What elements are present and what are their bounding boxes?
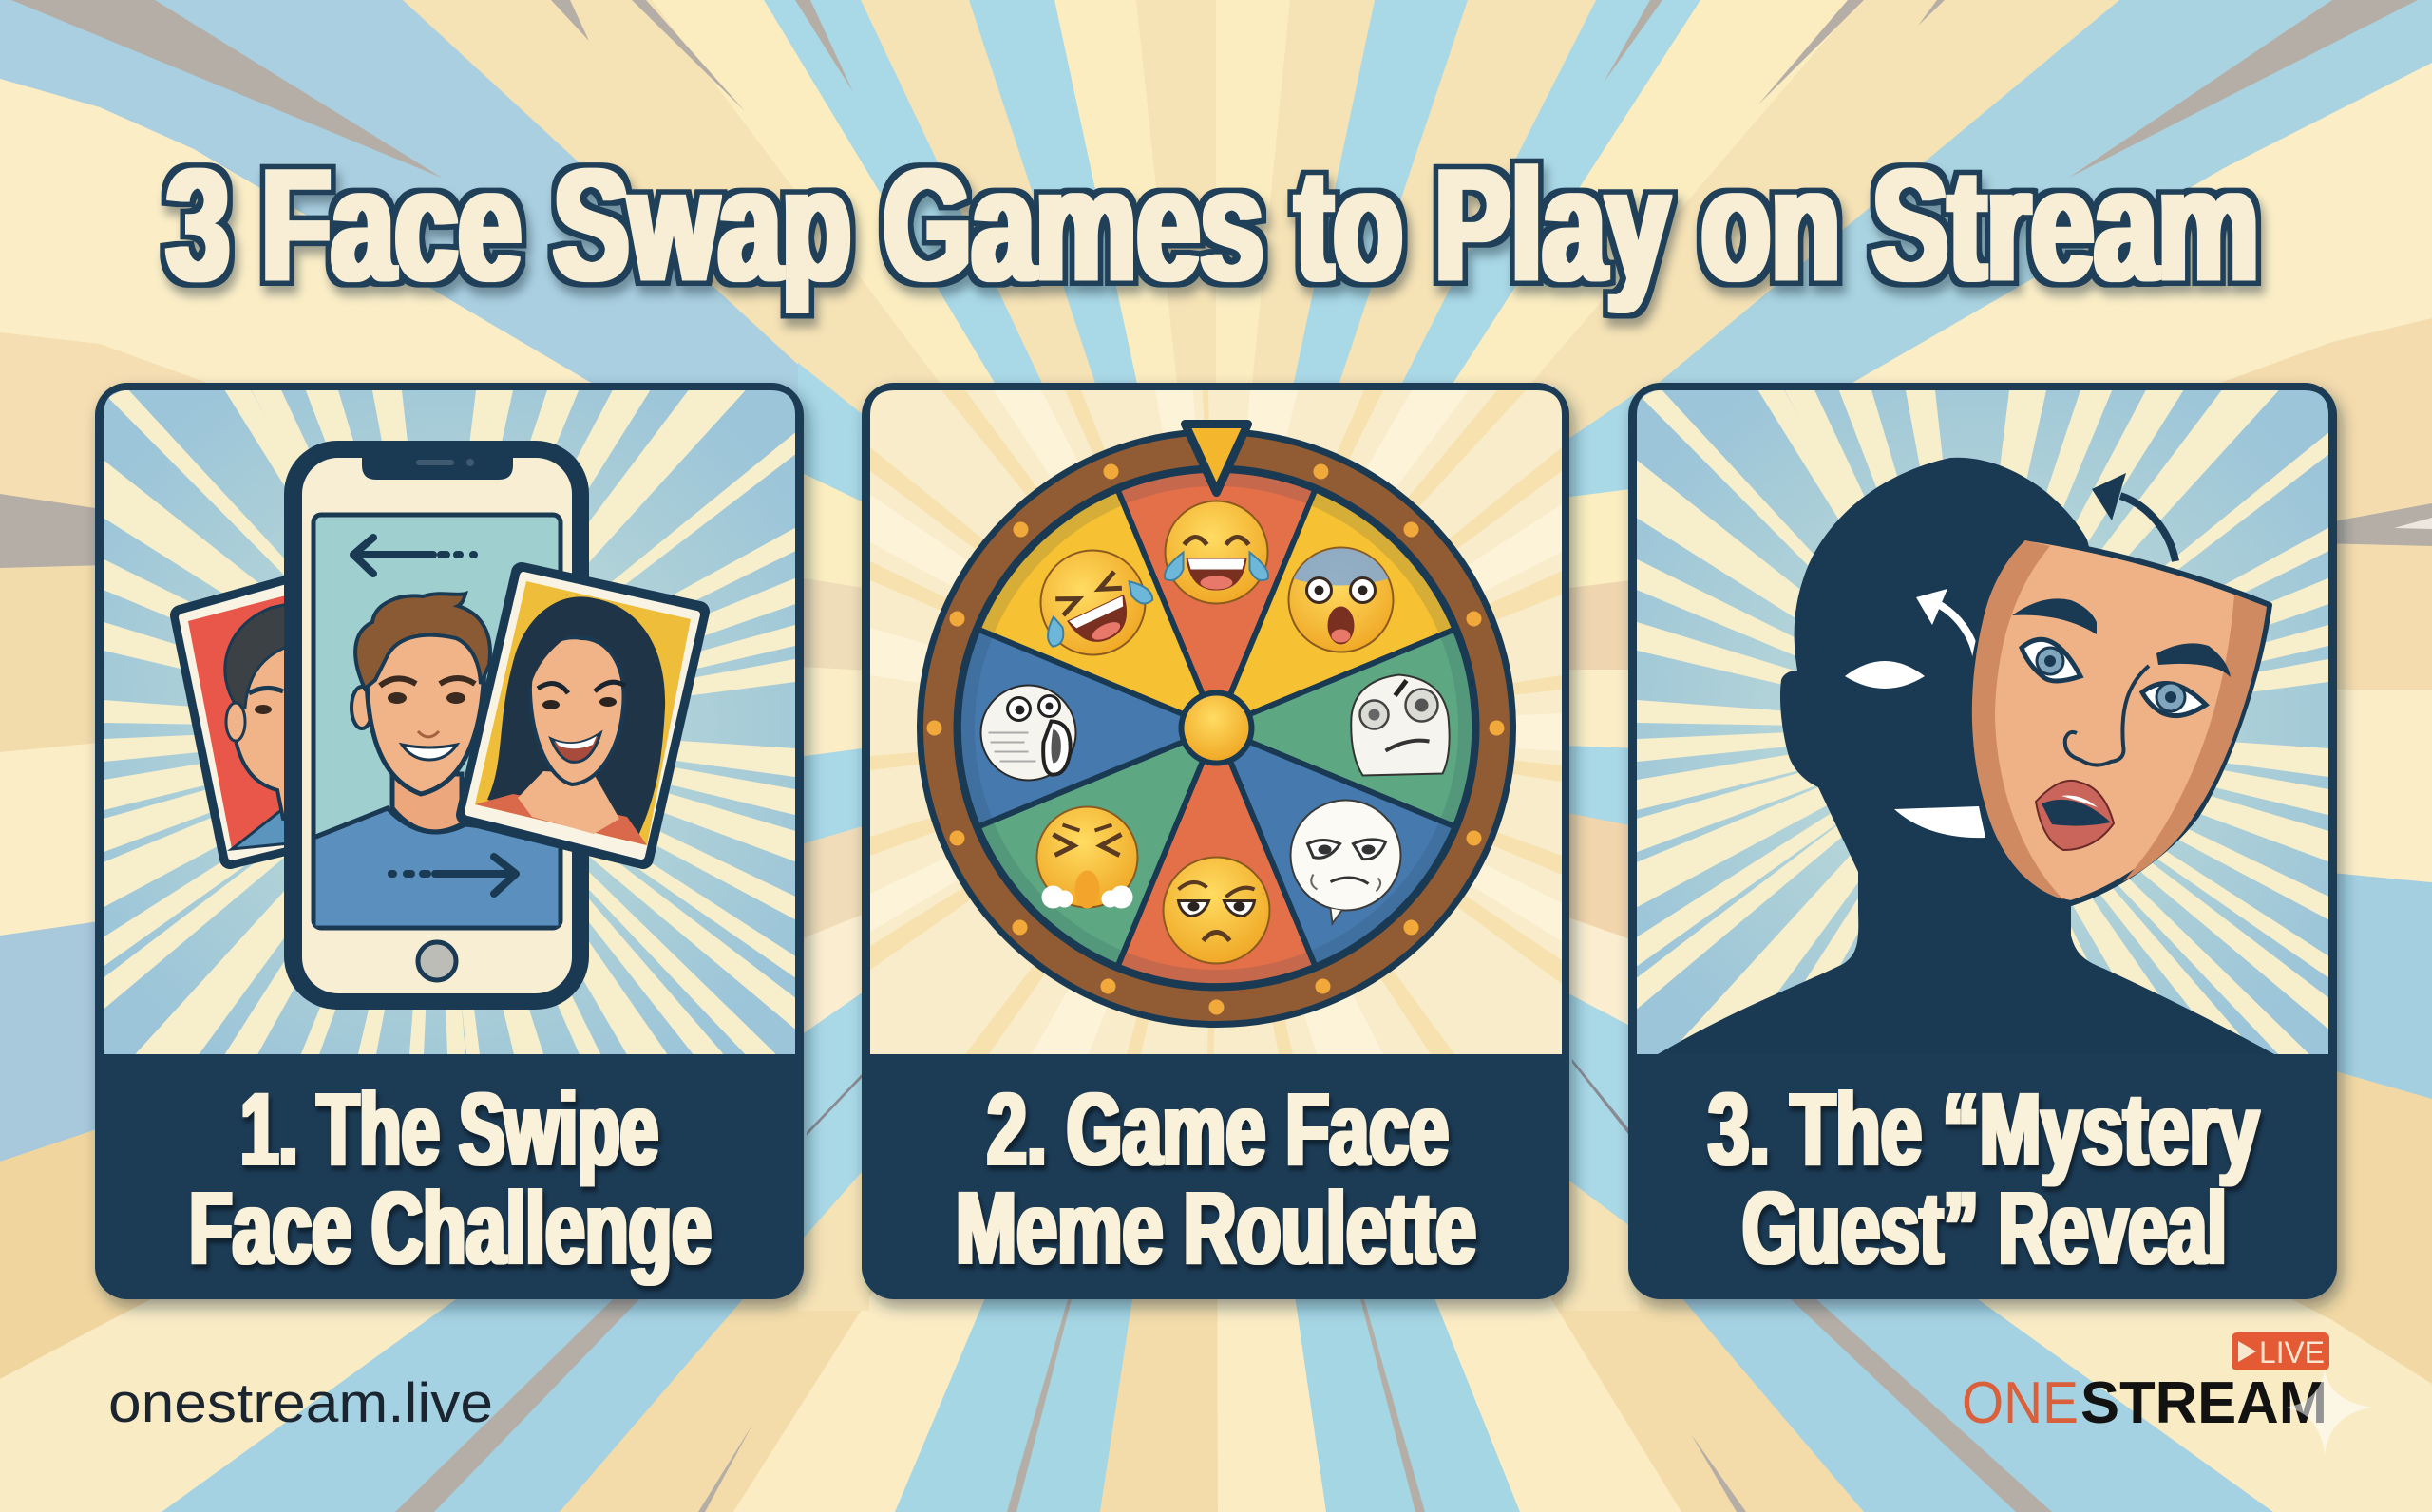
wheel slices xyxy=(959,470,1474,986)
swipe right arrow xyxy=(391,857,516,894)
live badge xyxy=(2232,1332,2329,1370)
meme face: rage xyxy=(1351,674,1450,775)
meme face: unimpressed xyxy=(1290,800,1400,923)
gap strips between panels xyxy=(798,361,869,1311)
mask left eye xyxy=(2022,639,2080,681)
phone notch xyxy=(362,458,513,480)
panel 2: game face meme roulette xyxy=(862,383,1569,1299)
emoji: unamused xyxy=(1163,857,1269,963)
panel 1 caption xyxy=(189,1071,712,1285)
mask mouth xyxy=(2036,781,2114,850)
meme face: lol xyxy=(980,686,1075,781)
silhouette white mouth xyxy=(1894,806,1986,838)
panel 3 caption: Guest” Reveal xyxy=(1742,1170,2227,1285)
man face on screen xyxy=(314,594,560,928)
wheel hub xyxy=(1178,690,1254,765)
wheel rim xyxy=(920,431,1512,1024)
peeled face mask xyxy=(1970,538,2270,903)
panel 2 caption xyxy=(956,1071,1476,1285)
silhouette white eye xyxy=(1845,661,1925,689)
panel 3 frame xyxy=(1628,383,2337,1299)
phone xyxy=(284,441,589,1010)
card: woman on yellow background xyxy=(466,573,699,859)
rim studs xyxy=(927,463,1505,1014)
white swap arrow xyxy=(1916,589,1977,661)
panel 1 frame xyxy=(95,383,804,1299)
logo wordmark: STREAM xyxy=(2080,1370,2328,1436)
panel 1 caption: Face Challenge xyxy=(189,1170,712,1285)
panel 3: mystery guest reveal xyxy=(1628,383,2337,1299)
navy silhouette xyxy=(1658,458,2274,1054)
phone screen xyxy=(314,515,560,928)
prize wheel xyxy=(920,424,1512,1024)
live badge: LIVE xyxy=(2259,1335,2325,1370)
logo wordmark: ONE xyxy=(1962,1370,2079,1436)
emoji: angry steam xyxy=(1037,807,1138,908)
panel 2 frame xyxy=(862,383,1569,1299)
panel 1: swipe face challenge xyxy=(95,383,804,1299)
panel 1 caption: 1. The Swipe xyxy=(240,1071,658,1186)
navy swap arrow xyxy=(2092,473,2176,561)
wheel pointer xyxy=(1186,424,1248,492)
panel 3 sunburst xyxy=(1637,390,2328,1054)
home button xyxy=(418,942,456,980)
emoji: scared xyxy=(1288,547,1393,652)
swipe left arrow xyxy=(353,538,474,574)
sparkle watermark xyxy=(2287,1370,2372,1455)
emoji: tears of joy xyxy=(1165,501,1268,604)
panel 1 sunburst xyxy=(104,390,795,1054)
mask nose xyxy=(2065,666,2149,765)
panel 2 sunburst xyxy=(870,390,1562,1054)
panel 2 caption: Meme Roulette xyxy=(956,1170,1476,1285)
panel 3 caption xyxy=(1708,1071,2259,1285)
mask right eye xyxy=(2142,683,2206,716)
mask eyebrows xyxy=(2012,598,2231,677)
website url: onestream.live xyxy=(108,1372,493,1434)
logo wordmark xyxy=(1962,1370,2328,1436)
panel 2 caption: 2. Game Face xyxy=(987,1071,1449,1186)
emoji: rofl tilted xyxy=(1019,532,1167,673)
onestream logo xyxy=(1962,1332,2372,1455)
card: man on red background xyxy=(180,581,332,859)
